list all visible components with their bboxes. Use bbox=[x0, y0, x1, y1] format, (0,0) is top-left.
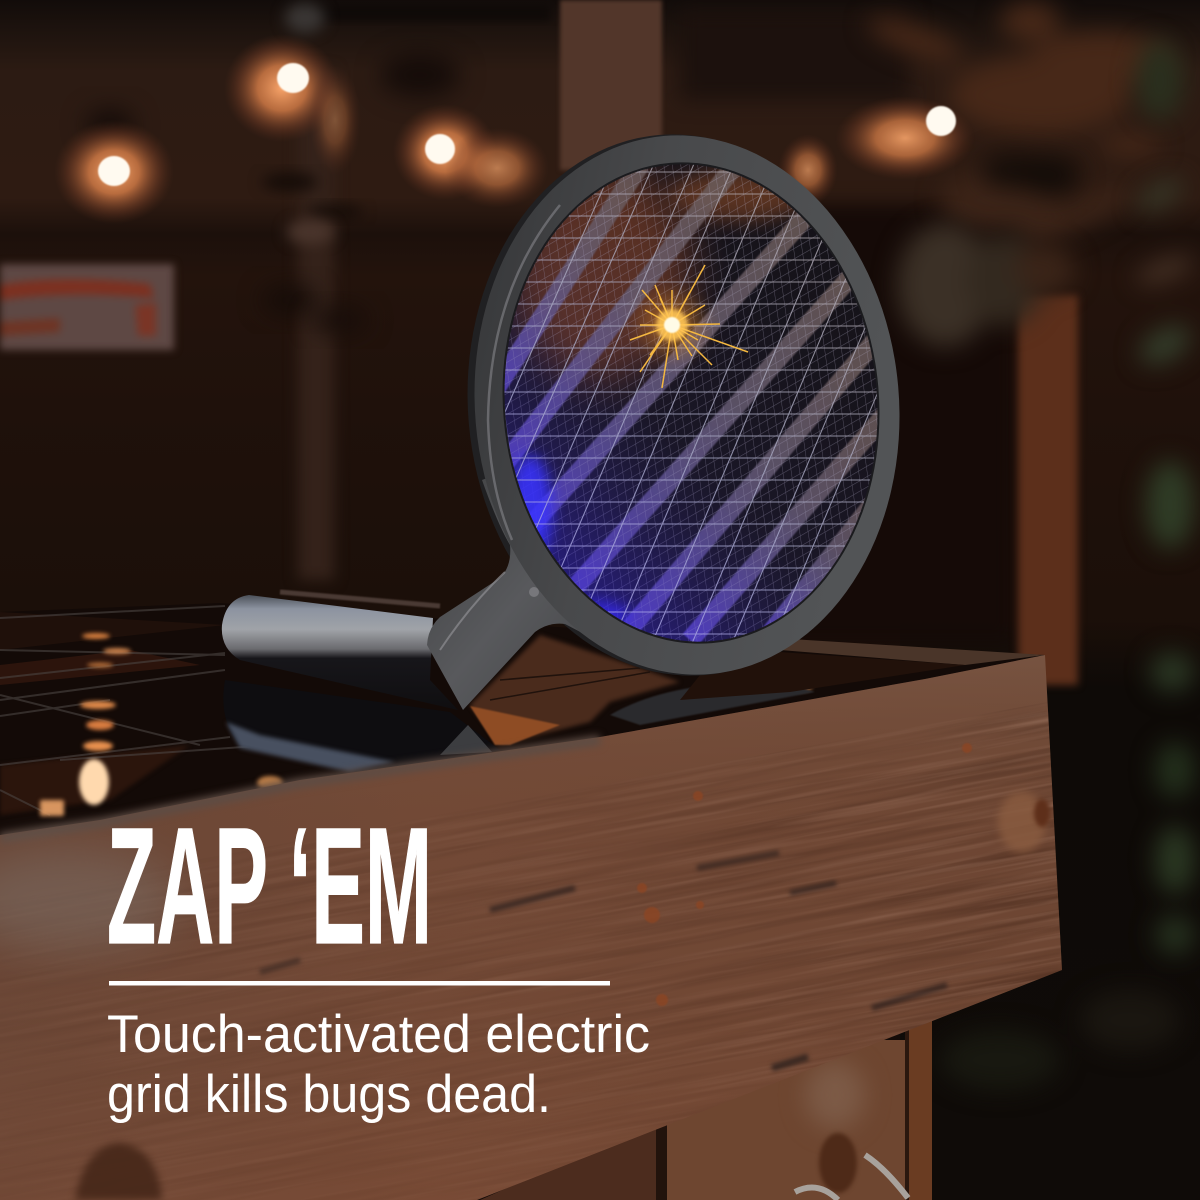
handle neck bbox=[427, 450, 640, 710]
outer ring bbox=[452, 118, 922, 692]
mirrored tube reflection bbox=[223, 680, 500, 772]
post knot bbox=[819, 1133, 857, 1193]
fence posts below beam bbox=[480, 1020, 932, 1200]
electric grid mesh bbox=[504, 164, 878, 642]
handle screw bbox=[529, 587, 539, 597]
infographic canvas: ZAP ‘EM bbox=[107, 794, 432, 979]
handle edge highlight bbox=[440, 572, 505, 650]
beam knot lower left bbox=[75, 1143, 162, 1200]
blurred right post bbox=[1018, 295, 1078, 685]
wood grain bbox=[450, 717, 1062, 1072]
soft top edge of beam bbox=[0, 740, 600, 838]
blurred string pole with dark clips bbox=[86, 3, 460, 580]
orange reflected tile under neck bbox=[470, 635, 680, 745]
body text: grid kills bugs dead. bbox=[107, 1065, 551, 1124]
wood knots and dark marks bbox=[260, 853, 947, 1068]
diagonal support bands bbox=[495, 165, 885, 640]
wooden beam bbox=[0, 655, 1062, 1200]
handle tube bbox=[222, 595, 458, 710]
body text bbox=[107, 1005, 650, 1124]
bug zapper racket bbox=[222, 134, 900, 710]
rust spots bbox=[637, 743, 972, 1006]
mirrored disc reflection bbox=[610, 682, 815, 725]
divider rule bbox=[109, 981, 610, 986]
metal hooks bbox=[795, 1155, 908, 1200]
beam knot right bbox=[998, 792, 1046, 852]
blurred fence sign bbox=[0, 264, 174, 350]
body text: Touch-activated electric bbox=[107, 1005, 650, 1064]
blurred foliage bbox=[863, 2, 1197, 1090]
ring inner edge bbox=[483, 147, 899, 659]
string lights bbox=[54, 34, 975, 224]
blurred vertical post top bbox=[560, 0, 662, 170]
wire lattice bbox=[504, 164, 878, 642]
ring highlight bbox=[488, 205, 560, 540]
tiled table top with reflections bbox=[0, 592, 1045, 840]
tile reflections bbox=[40, 633, 812, 816]
spark bbox=[630, 265, 748, 388]
back rim of box bbox=[775, 638, 1045, 665]
spark glow bbox=[642, 295, 702, 355]
ring back side shadow bbox=[445, 116, 919, 694]
greyed left end of beam bbox=[0, 850, 180, 950]
